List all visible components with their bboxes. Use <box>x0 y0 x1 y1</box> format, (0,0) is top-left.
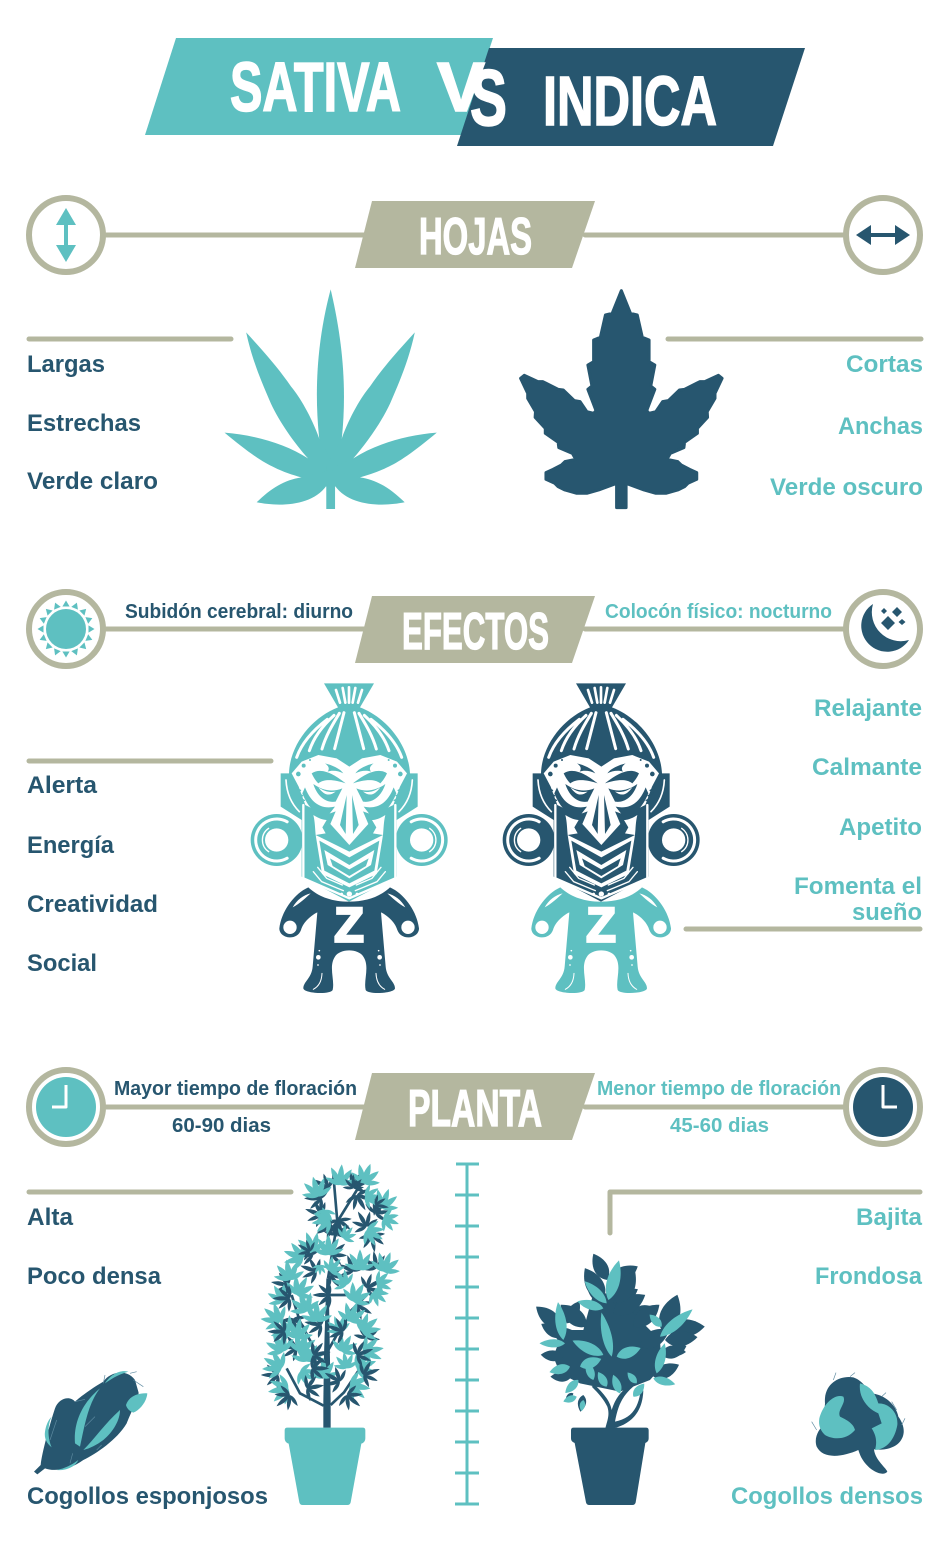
indica leaf list <box>668 339 923 501</box>
sativa effects list: Creatividad <box>27 891 158 918</box>
heading: v of vs: V <box>437 48 485 126</box>
sativa plant list <box>27 1192 291 1290</box>
banner: hojas: HOJAS <box>419 208 532 266</box>
indica effects list: Relajante <box>814 695 922 722</box>
sativa effects list: Social <box>27 950 97 977</box>
header line <box>106 1104 843 1110</box>
heading: indica: INDICA <box>543 62 717 140</box>
banner: planta <box>355 1073 595 1140</box>
icon: indica mask figure: Z <box>586 899 616 953</box>
indica plant list <box>610 1192 923 1290</box>
header line <box>106 626 843 632</box>
heading: s of vs: S <box>470 53 507 142</box>
indica plant list: Bajita <box>856 1204 923 1231</box>
icon: clock short <box>846 1070 920 1144</box>
panel: title banner <box>145 38 805 146</box>
heading: sativa: SATIVA <box>230 48 401 126</box>
label: cogollos esponjosos: Cogollos esponjosos <box>27 1483 268 1510</box>
panel: hojas <box>27 198 923 509</box>
indica effects list <box>686 695 922 929</box>
panel: efectos <box>27 592 922 993</box>
banner: efectos: EFECTOS <box>402 603 549 661</box>
icon: indica mask figure <box>503 683 700 993</box>
sativa effects list: Energía <box>27 832 115 859</box>
label: mayor tiempo: 60-90 dias <box>172 1115 271 1137</box>
indica plant list: Frondosa <box>815 1263 923 1290</box>
height scale <box>455 1164 479 1504</box>
banner: hojas <box>355 201 595 268</box>
label: mayor tiempo <box>114 1078 357 1137</box>
sativa plant list: Poco densa <box>27 1263 162 1290</box>
label: menor tiempo: 45-60 dias <box>670 1115 769 1137</box>
indica effects list: Apetito <box>839 814 922 841</box>
label: colocon fisico: Colocón físico: nocturno <box>605 601 832 623</box>
indica effects list: Calmante <box>812 754 922 781</box>
icon: sativa bud <box>34 1371 147 1474</box>
indica effects list: Fomenta el <box>794 873 922 900</box>
sativa plant list: Alta <box>27 1204 74 1231</box>
icon: long leaf arrow <box>29 198 103 272</box>
label: cogollos densos: Cogollos densos <box>731 1483 923 1510</box>
banner: indica <box>457 48 805 146</box>
icon: indica bud <box>812 1373 905 1474</box>
icon: clock long <box>29 1070 103 1144</box>
indica leaf list: Anchas <box>838 413 923 440</box>
sativa leaf list: Verde claro <box>27 468 158 495</box>
icon: sativa mask figure: Z <box>334 899 364 953</box>
icon: indica plant <box>531 1250 706 1505</box>
sativa leaf list: Largas <box>27 351 105 378</box>
label: subidon cerebral: Subidón cerebral: diurno <box>125 601 353 623</box>
icon: moon and stars <box>846 592 920 666</box>
icon: indica leaf <box>521 291 722 508</box>
icon: sativa plant <box>254 1158 406 1505</box>
sativa leaf list <box>27 339 231 495</box>
label: menor tiempo: Menor tiempo de floración <box>597 1078 841 1100</box>
icon: sativa leaf <box>225 289 437 509</box>
banner: planta: PLANTA <box>408 1080 542 1138</box>
sativa effects list <box>27 761 271 977</box>
banner: sativa <box>145 38 493 135</box>
icon: wide leaf arrow <box>846 198 920 272</box>
header line <box>106 232 843 238</box>
panel: planta <box>27 1070 923 1510</box>
indica leaf list: Verde oscuro <box>770 474 923 501</box>
label: menor tiempo <box>597 1078 841 1137</box>
icon: sativa mask figure <box>251 683 448 993</box>
label: mayor tiempo: Mayor tiempo de floración <box>114 1078 357 1100</box>
indica effects list: sueño <box>852 899 922 926</box>
sativa effects list: Alerta <box>27 772 98 799</box>
icon: sun <box>29 592 103 666</box>
banner: efectos <box>355 596 595 663</box>
indica leaf list: Cortas <box>846 351 923 378</box>
sativa leaf list: Estrechas <box>27 410 141 437</box>
